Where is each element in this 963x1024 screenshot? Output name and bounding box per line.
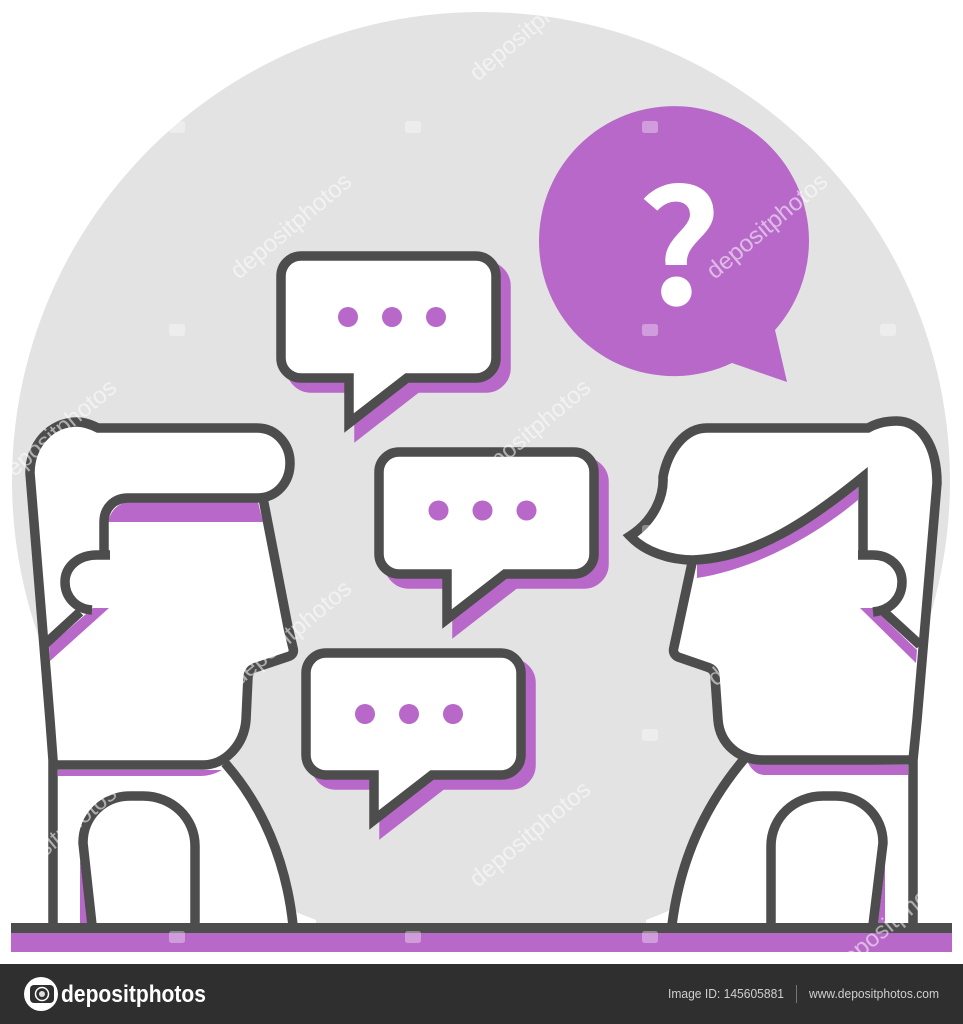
person: left man <box>30 422 293 925</box>
image id: Image ID: 145605881 <box>668 987 784 1001</box>
chat bubble 1 <box>281 256 506 433</box>
left man purple shading <box>49 502 263 923</box>
right man purple shading <box>697 486 917 923</box>
footer bar <box>0 964 963 1024</box>
speech bubble with question mark <box>539 106 809 382</box>
watermarks: depositphotos <box>701 168 833 285</box>
watermarks: depositphotos <box>827 863 959 980</box>
watermarks: depositphotos <box>702 575 834 692</box>
person: right man <box>630 421 937 925</box>
table <box>11 923 952 952</box>
watermarks: depositphotos <box>225 168 357 285</box>
left man silhouette <box>30 422 293 925</box>
watermark camera marks <box>169 121 896 943</box>
watermarks: depositphotos <box>225 575 357 692</box>
watermarks: depositphotos <box>464 374 596 491</box>
logo wordmark: depositphotos <box>61 981 206 1008</box>
right man outline <box>630 421 937 925</box>
question mark: ? <box>636 122 722 350</box>
chat bubble 2 <box>379 452 604 629</box>
website: www.depositphotos.com <box>808 987 939 1001</box>
left man outline <box>30 422 293 925</box>
watermarks: depositphotos <box>464 776 596 893</box>
chat bubble 3 <box>306 653 531 830</box>
right man silhouette <box>630 421 937 925</box>
logo icon: camera <box>24 977 58 1011</box>
